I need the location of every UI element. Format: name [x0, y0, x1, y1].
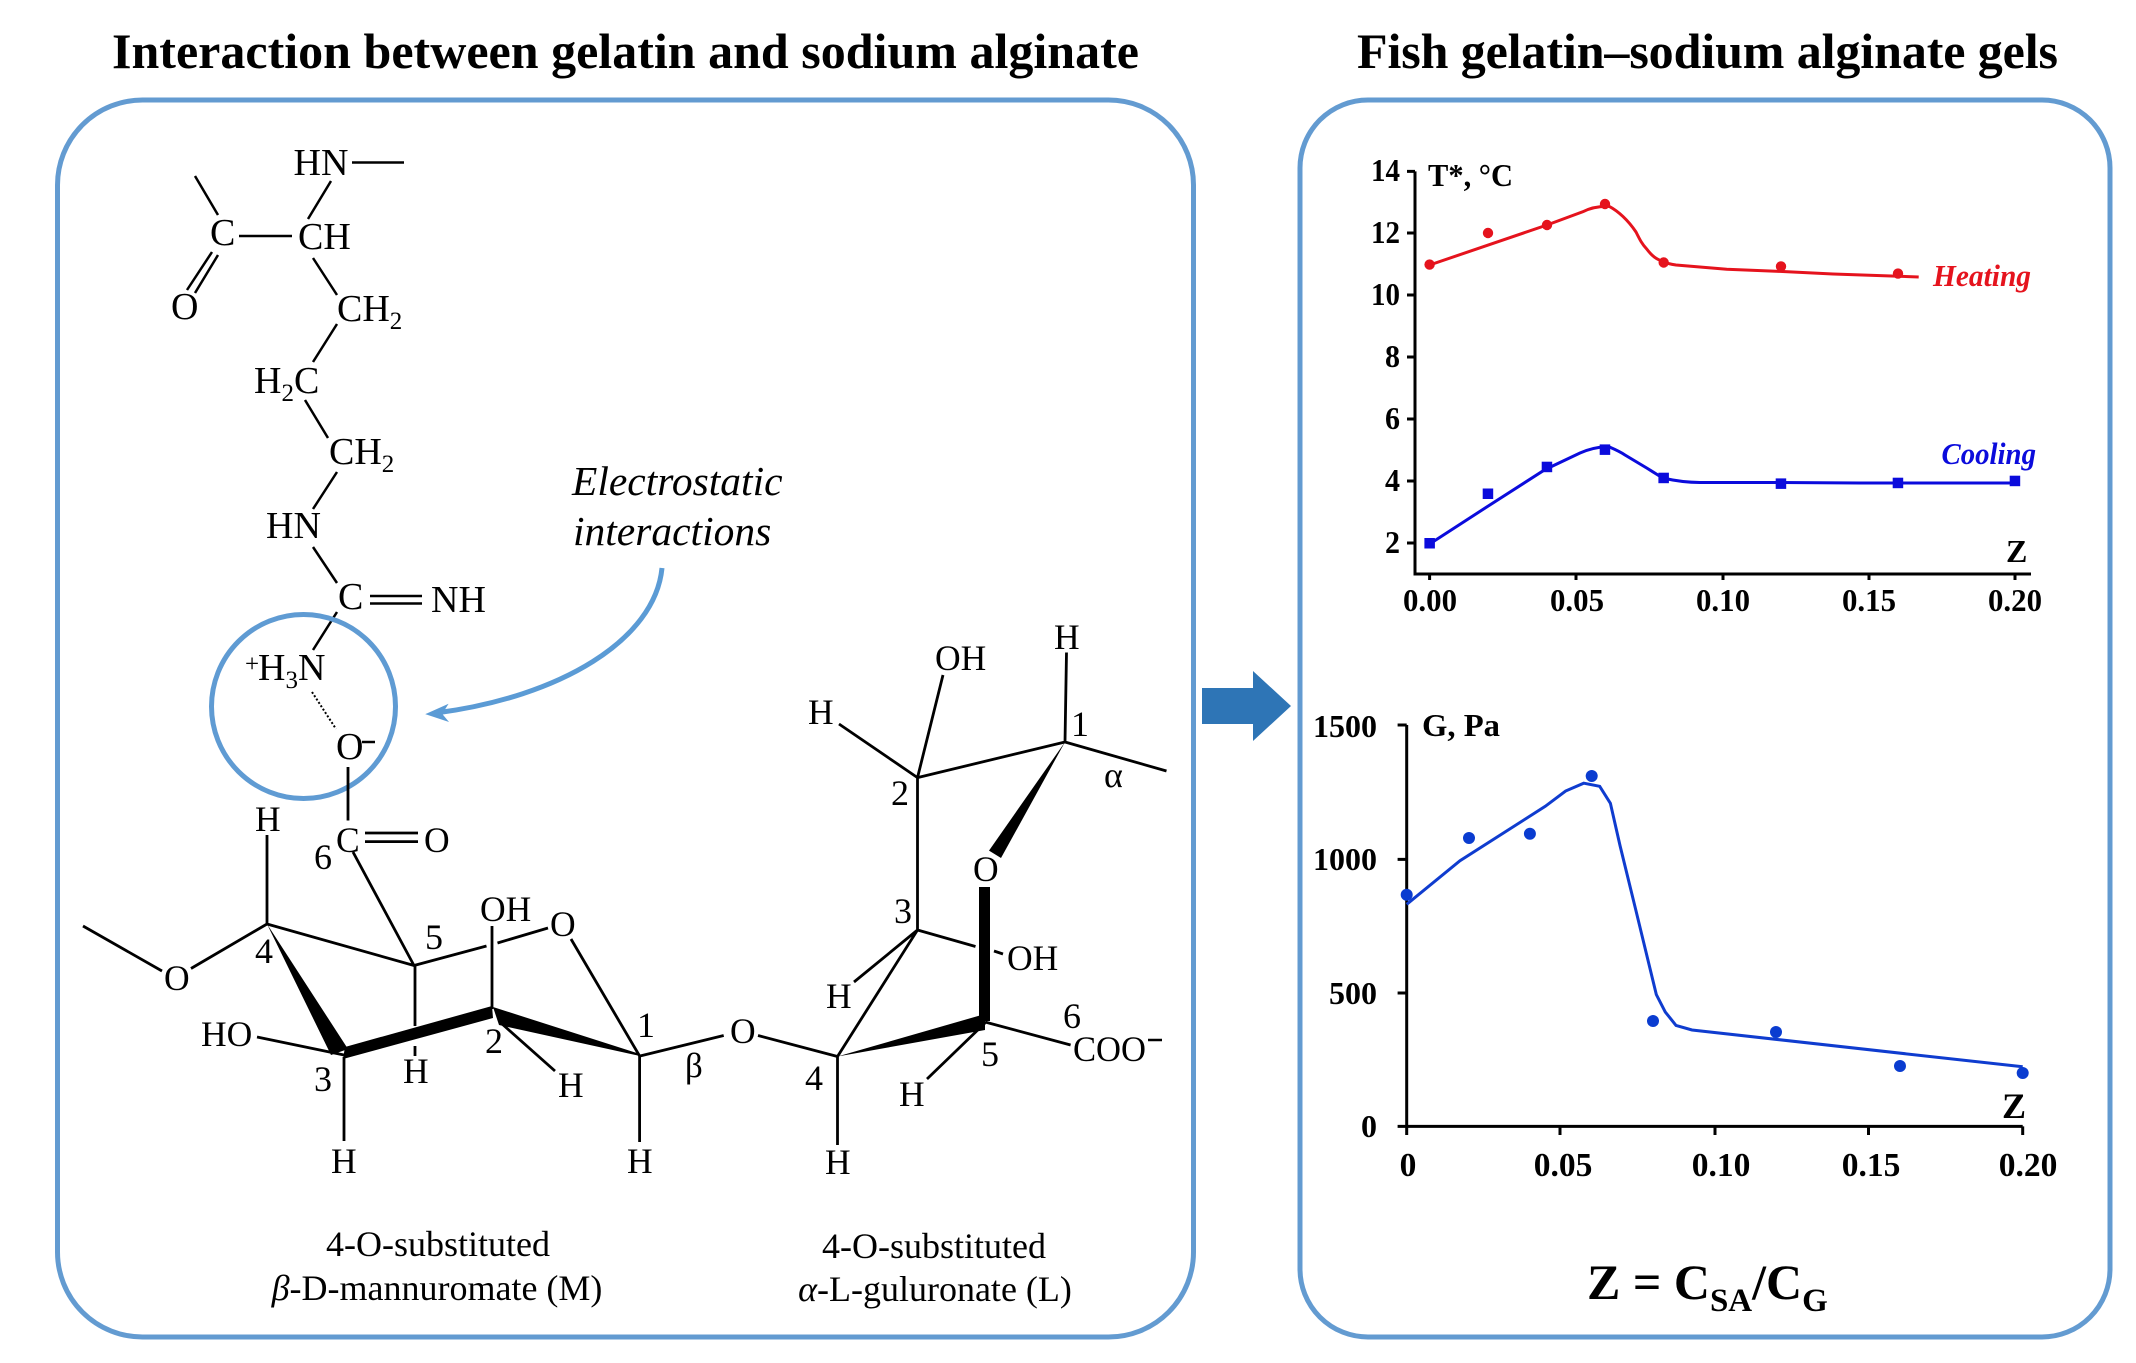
- gelatin side chain structure: H: [254, 360, 281, 402]
- guluronate ring structure: COO: [1073, 1029, 1146, 1069]
- title: left panel heading: Interaction between gelatin and sodium alginate: [112, 23, 1139, 79]
- gelatin side chain structure: C: [338, 576, 363, 618]
- chart 2 y axis numbers: 0: [1361, 1108, 1377, 1144]
- chart: G versus Z: [1313, 707, 2057, 1184]
- mannuronate ring structure: O: [550, 904, 576, 944]
- chart 2 y axis numbers: 1500: [1313, 708, 1377, 744]
- mannuronate ring structure: H: [255, 799, 281, 839]
- ionic pair highlighted by circle: 3: [285, 667, 298, 694]
- chart 1 axes and ticks: [1407, 171, 2031, 580]
- chart 2 y axis numbers: [1313, 708, 1377, 1144]
- chart 2 axes and ticks: [1398, 725, 2023, 1135]
- mannuronate ring structure: 5: [425, 917, 443, 957]
- series: cooling: [1424, 436, 2036, 548]
- mannuronate ring structure: H: [558, 1065, 584, 1105]
- mannuronate ring structure: β: [685, 1046, 703, 1085]
- mannuronate ring structure: C: [336, 820, 360, 860]
- guluronate ring structure: O: [730, 1011, 756, 1051]
- chart 1 y axis numbers: 8: [1385, 338, 1400, 374]
- label: mannuromate unit: β-D-mannuromate (M): [271, 1268, 602, 1308]
- gelatin side chain structure: [171, 142, 486, 650]
- formula: Z definition: G: [1802, 1283, 1828, 1319]
- gelatin side chain structure: CH: [298, 216, 351, 258]
- chart 2 y axis numbers: 1000: [1313, 841, 1377, 877]
- gelatin side chain structure: C: [294, 360, 319, 402]
- arrow: from structure to properties: [1202, 671, 1291, 741]
- chart 1 x axis numbers: 0.20: [1988, 582, 2042, 618]
- chart 1 x axis numbers: 0.05: [1550, 582, 1604, 618]
- label: mannuromate unit: 4-O-substituted: [326, 1224, 550, 1264]
- formula: Z definition: SA: [1710, 1283, 1752, 1319]
- mannuronate ring structure: H: [627, 1141, 653, 1181]
- callout: electrostatic interactions: Electrostatic: [571, 458, 783, 504]
- label: guluronate unit: α-L-guluronate (L): [798, 1269, 1072, 1309]
- chart 2 y axis title: G, Pa: [1422, 707, 1500, 743]
- chart 1 y axis numbers: 6: [1385, 400, 1400, 436]
- gelatin side chain structure: NH: [431, 579, 486, 621]
- guluronate ring structure: 5: [981, 1034, 999, 1074]
- label: mannuromate unit: [271, 1224, 602, 1308]
- chart 1 x axis numbers: [1403, 582, 2042, 618]
- ionic pair highlighted by circle: +: [245, 651, 259, 678]
- label: guluronate unit: 4-O-substituted: [822, 1226, 1046, 1266]
- chart 2 x axis numbers: 0.15: [1842, 1147, 1900, 1184]
- chart 1 y axis numbers: 10: [1371, 276, 1400, 312]
- ionic pair highlighted by circle: [212, 614, 396, 798]
- gelatin side chain structure: 2: [390, 308, 402, 335]
- chart 2 y axis numbers: 500: [1329, 975, 1377, 1011]
- guluronate ring structure: H: [808, 692, 834, 732]
- guluronate ring structure: O: [973, 849, 999, 889]
- chart 2 x axis numbers: 0.20: [1999, 1147, 2057, 1184]
- gelatin side chain structure: 2: [281, 380, 294, 407]
- mannuronate ring structure: H: [331, 1141, 357, 1181]
- ionic pair highlighted by circle: O: [336, 726, 363, 768]
- chart 1 y axis numbers: 14: [1371, 152, 1400, 188]
- mannuronate ring structure: 6: [314, 837, 332, 877]
- formula: Z definition: Z = C: [1587, 1254, 1710, 1310]
- chart 1 y axis title: T*, °C: [1428, 157, 1513, 193]
- guluronate ring structure: H: [899, 1074, 925, 1114]
- chart 1 y axis numbers: [1371, 152, 1400, 560]
- panel: fish gelatin-sodium alginate gels: [1300, 100, 2110, 1337]
- guluronate ring structure: H: [825, 1142, 851, 1182]
- title: right panel heading: Fish gelatin–sodium alginate gels: [1357, 23, 2058, 79]
- chart: T* versus Z: [1371, 152, 2042, 618]
- mannuronate ring structure: HO: [201, 1014, 252, 1054]
- chart 2 x axis numbers: 0.10: [1692, 1147, 1750, 1184]
- mannuronate ring structure: 2: [485, 1021, 503, 1061]
- mannuronate ring structure: 1: [637, 1005, 655, 1045]
- gelatin side chain structure: O: [171, 286, 198, 328]
- series: heating: Heating: [1932, 258, 2031, 293]
- callout: electrostatic interactions: interactions: [573, 508, 771, 554]
- chart 1 x axis title: Z: [2006, 533, 2027, 569]
- label: guluronate unit: [798, 1226, 1072, 1309]
- ionic pair highlighted by circle: N: [298, 647, 325, 689]
- mannuronate ring structure: OH: [480, 889, 531, 929]
- chart 1 y axis numbers: 4: [1385, 462, 1400, 498]
- formula: Z definition: /C: [1751, 1254, 1802, 1310]
- mannuronate ring structure: O: [164, 958, 190, 998]
- chart 2 x axis numbers: [1400, 1147, 2057, 1184]
- mannuronate ring structure: O: [424, 820, 450, 860]
- callout: electrostatic interactions: [571, 458, 783, 554]
- gelatin side chain structure: 2: [382, 451, 394, 478]
- guluronate ring structure: OH: [1007, 938, 1058, 978]
- ionic pair highlighted by circle: H: [258, 647, 285, 689]
- guluronate ring structure: 3: [894, 891, 912, 931]
- guluronate ring structure: H: [826, 976, 852, 1016]
- guluronate ring structure: 2: [891, 773, 909, 813]
- gelatin side chain structure: CH: [329, 431, 382, 473]
- series: heating: [1424, 199, 2031, 293]
- series: G modulus: [1401, 770, 2029, 1079]
- mannuronate ring structure: H: [403, 1051, 429, 1091]
- chart 2 x axis numbers: 0: [1400, 1147, 1416, 1184]
- chart 1 x axis numbers: 0.15: [1842, 582, 1896, 618]
- gelatin side chain structure: HN: [294, 142, 348, 184]
- guluronate ring structure: OH: [935, 638, 986, 678]
- guluronate ring structure: 1: [1071, 704, 1089, 744]
- chart 1 y axis numbers: 2: [1385, 524, 1400, 560]
- series: cooling: Cooling: [1942, 436, 2036, 471]
- guluronate ring structure: α: [1104, 755, 1123, 795]
- guluronate ring structure: [730, 617, 1166, 1182]
- mannuronate ring structure: 3: [314, 1059, 332, 1099]
- guluronate ring structure: H: [1054, 617, 1080, 657]
- chart 1 x axis numbers: 0.10: [1696, 582, 1750, 618]
- chart 2 x axis numbers: 0.05: [1534, 1147, 1592, 1184]
- panel: interaction between gelatin and sodium alginate: [58, 100, 1194, 1337]
- gelatin side chain structure: C: [210, 212, 235, 254]
- chart 1 y axis numbers: 12: [1371, 214, 1400, 250]
- gelatin side chain structure: CH: [337, 288, 390, 330]
- chart 1 x axis numbers: 0.00: [1403, 582, 1457, 618]
- arrow: callout to ionic pair: [428, 568, 662, 720]
- mannuronate ring structure: [83, 767, 724, 1181]
- guluronate ring structure: 6: [1063, 996, 1081, 1036]
- mannuronate ring structure: 4: [255, 931, 273, 971]
- chart 2 x axis title: Z: [2002, 1086, 2026, 1126]
- gelatin side chain structure: HN: [266, 505, 321, 547]
- guluronate ring structure: 4: [805, 1058, 823, 1098]
